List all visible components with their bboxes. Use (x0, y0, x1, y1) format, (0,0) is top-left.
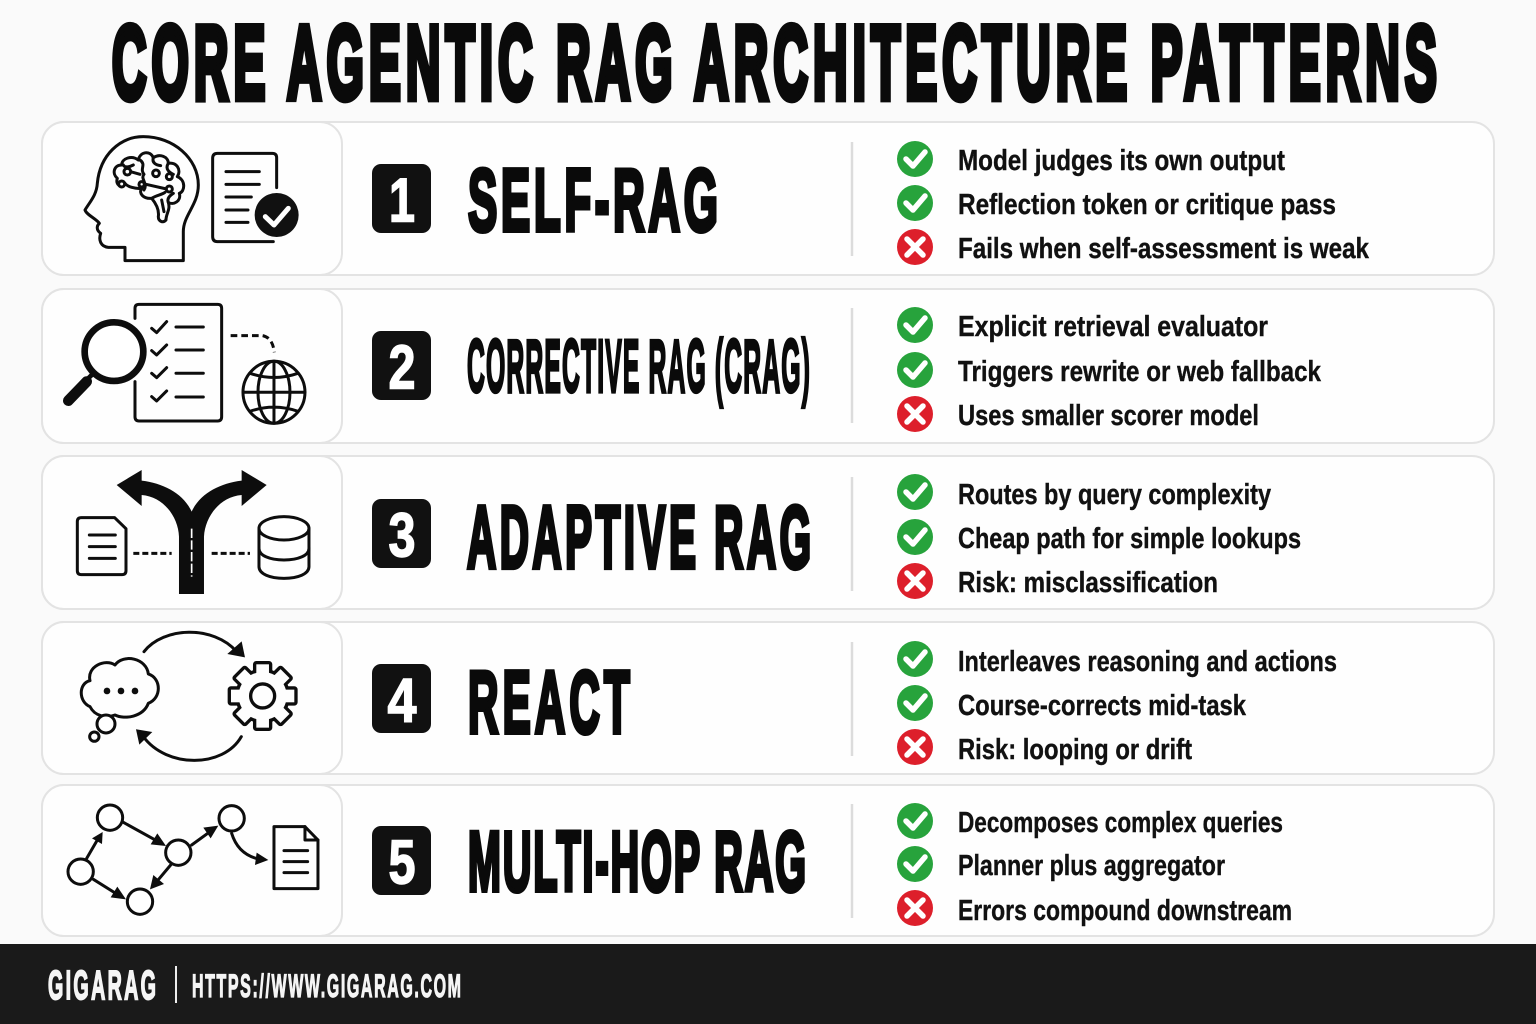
heading: adaptive rag: ADAPTIVE RAG (467, 488, 811, 587)
icon: check (897, 307, 933, 343)
panel: multi-hop rag (42, 785, 1494, 936)
text: pro: Decomposes complex queries (958, 807, 1283, 839)
footer url: HTTPS://WWW.GIGARAG.COM (192, 969, 461, 1005)
bullet list: multi-hop rag (897, 803, 1292, 927)
bullet list: adaptive rag (897, 474, 1301, 599)
icon: check (897, 846, 933, 882)
icon: node graph and document (68, 805, 318, 914)
panel: react (42, 622, 1494, 774)
number badge 2: 2 (388, 334, 416, 402)
text: pro: Reflection token or critique pass (958, 189, 1336, 221)
text: pro: Triggers rewrite or web fallback (958, 356, 1322, 388)
panel: self-rag (42, 122, 1494, 275)
text: con: Risk: misclassification (958, 567, 1218, 599)
heading: multi-hop rag: MULTI-HOP RAG (468, 815, 806, 908)
bullet list: self-rag (897, 141, 1370, 265)
icon: brain and approved document (85, 137, 299, 261)
text: pro: Cheap path for simple lookups (958, 523, 1301, 555)
text: con: Risk: looping or drift (958, 734, 1192, 766)
text: pro: Explicit retrieval evaluator (958, 311, 1268, 343)
panel: corrective rag (42, 289, 1494, 443)
bullet list: react (897, 641, 1337, 766)
heading: self-rag: SELF-RAG (468, 151, 718, 249)
text: pro: Course-corrects mid-task (958, 690, 1247, 722)
number badge 4: 4 (388, 666, 417, 736)
icon: check (897, 352, 933, 388)
icon: check (897, 519, 933, 555)
text: con: Uses smaller scorer model (958, 400, 1259, 432)
heading: corrective rag: CORRECTIVE RAG (CRAG) (467, 324, 810, 408)
icon: thought cloud and gear loop (81, 632, 294, 760)
number badge 1: 1 (389, 166, 415, 236)
icon: cross (897, 396, 933, 432)
icon: cross (897, 890, 933, 926)
icon: cross (897, 563, 933, 599)
icon: check (897, 685, 933, 721)
icon: check (897, 474, 933, 510)
icon: check (897, 141, 933, 177)
bullet list: corrective rag (897, 307, 1322, 432)
icon: cross (897, 229, 933, 265)
number badge 1 (372, 164, 431, 236)
text: con: Fails when self-assessment is weak (958, 233, 1370, 265)
heading: react: REACT (468, 653, 630, 752)
text: pro: Planner plus aggregator (958, 850, 1225, 882)
number badge 4 (372, 664, 431, 736)
footer brand: GIGARAG (48, 962, 156, 1008)
title: CORE AGENTIC RAG ARCHITECTURE PATTERNS (112, 6, 1437, 122)
icon: magnifier, checklist and globe (68, 304, 305, 423)
icon: cross (897, 729, 933, 765)
icon: forked road, document and database (77, 470, 309, 594)
icon: check (897, 185, 933, 221)
text: pro: Interleaves reasoning and actions (958, 646, 1337, 678)
text: pro: Model judges its own output (958, 145, 1285, 177)
number badge 5: 5 (388, 828, 416, 898)
text: pro: Routes by query complexity (958, 479, 1271, 511)
number badge 5 (372, 826, 431, 898)
number badge 2 (372, 331, 431, 402)
number badge 3 (372, 499, 431, 570)
text: con: Errors compound downstream (958, 895, 1292, 927)
icon: check (897, 803, 933, 839)
footer bar (0, 944, 1536, 1024)
number badge 3: 3 (388, 502, 416, 570)
panel: adaptive rag (42, 456, 1494, 609)
icon: check (897, 641, 933, 677)
